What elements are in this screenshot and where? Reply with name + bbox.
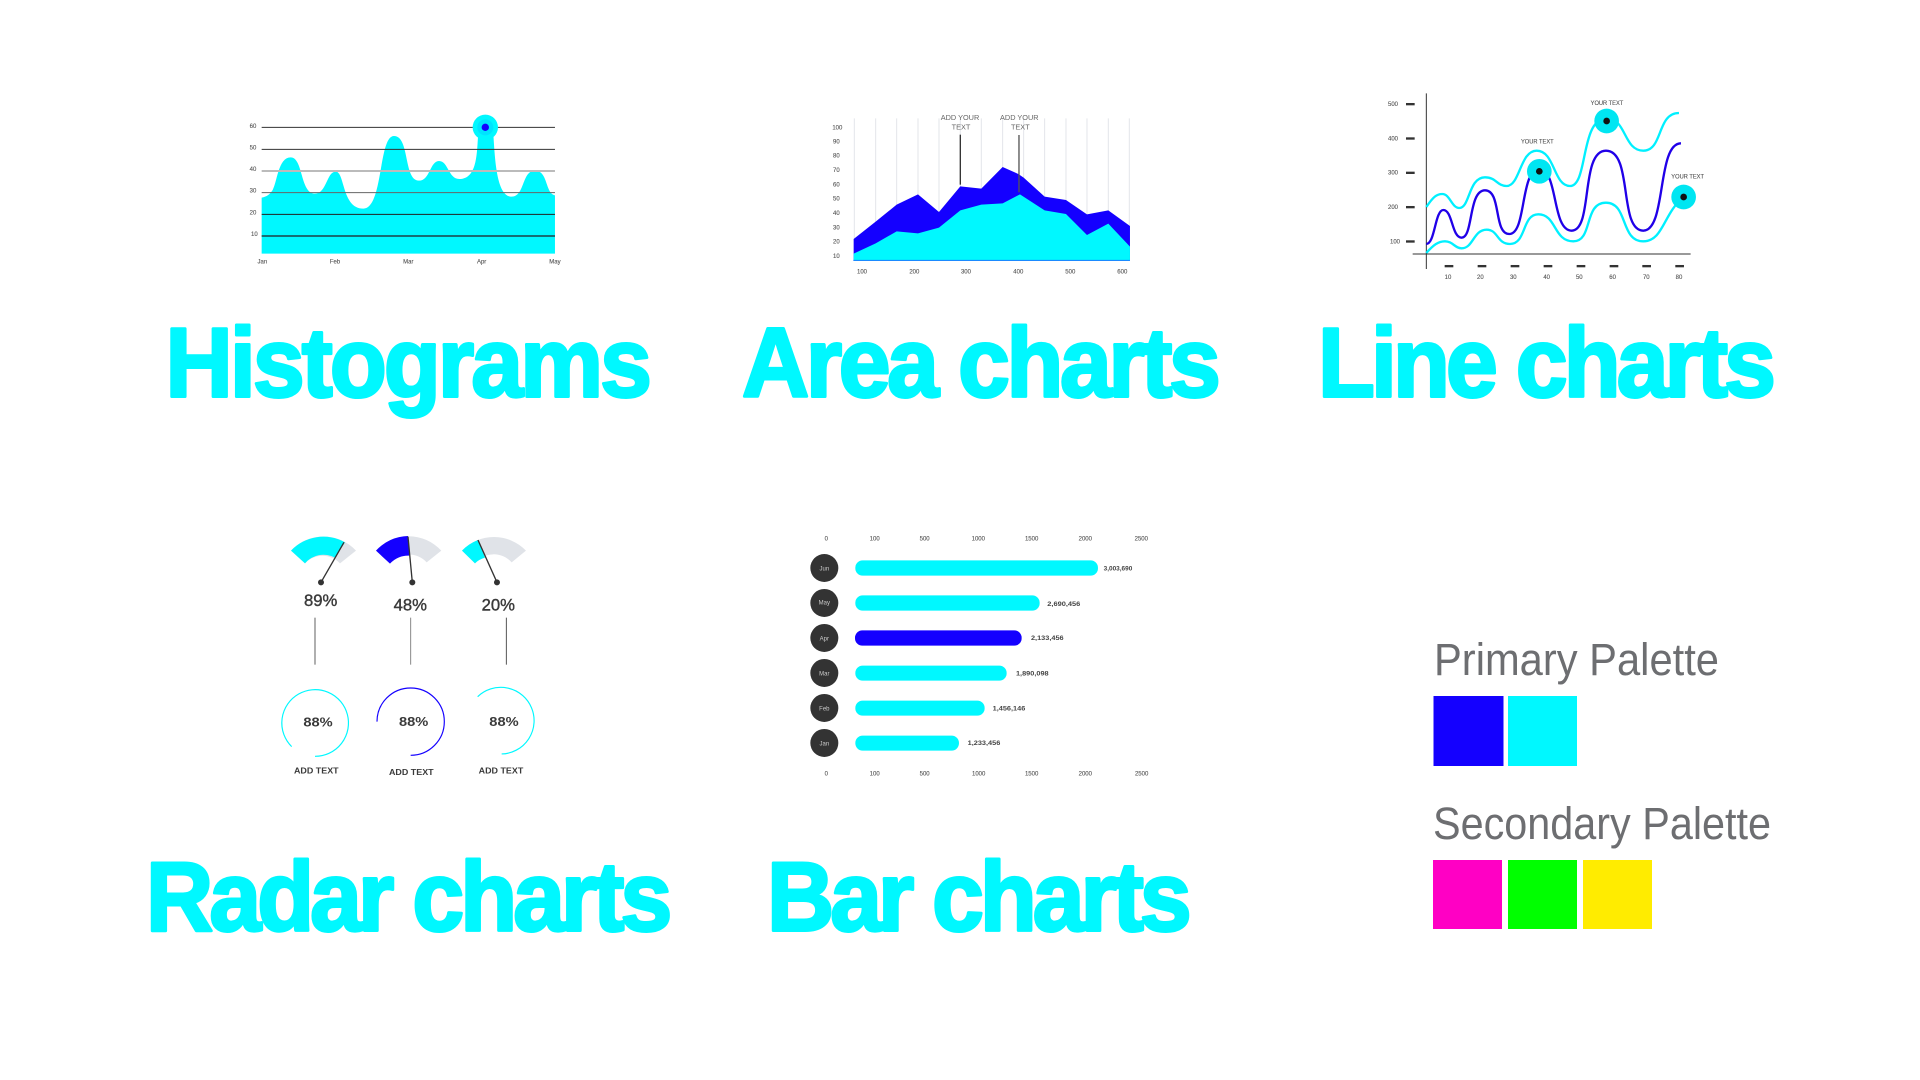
histogram x axis labels: Apr — [477, 260, 486, 266]
marker at 40 — [1527, 159, 1552, 184]
histogram y axis labels — [250, 124, 258, 238]
bar chart bottom axis: 0 — [825, 772, 829, 778]
histogram x axis labels: Mar — [403, 260, 413, 266]
line chart x labels: 40 — [1543, 275, 1551, 281]
bar values: 1,456,146 — [993, 706, 1026, 712]
panel: radar charts — [282, 536, 534, 777]
line chart x labels: 20 — [1477, 275, 1484, 281]
area chart y axis labels: 60 — [833, 182, 840, 188]
line chart x labels: 60 — [1609, 275, 1617, 281]
ring 3: ADD TEXT — [479, 766, 523, 775]
ring 2: 88% — [399, 715, 428, 729]
annotation: first add your text — [941, 113, 979, 185]
title: Area charts: Area charts — [742, 308, 1221, 418]
line chart x labels: 30 — [1510, 275, 1517, 281]
line chart y labels: 400 — [1388, 136, 1399, 142]
area chart y axis labels: 70 — [833, 168, 840, 174]
histogram x axis labels: May — [549, 260, 561, 266]
bar chart bottom axis: 100 — [870, 772, 880, 778]
bar chart top axis — [825, 537, 1149, 543]
area chart vertical grid — [854, 118, 1129, 260]
gauge 20 percent — [462, 537, 526, 614]
annotation: second add your text: TEXT — [1011, 123, 1030, 132]
cyan area series — [854, 194, 1130, 261]
panel: area chart — [832, 113, 1130, 275]
line chart x labels — [1445, 275, 1683, 281]
line chart tick marks — [1406, 103, 1684, 267]
line chart y labels: 200 — [1388, 205, 1399, 211]
ring 3 — [478, 687, 534, 775]
month badges: Mar — [819, 671, 829, 677]
title: Radar charts: Radar charts — [146, 842, 672, 952]
bar chart top axis: 0 — [825, 537, 829, 543]
month badges: Jan — [820, 741, 829, 747]
line chart x labels: 50 — [1576, 275, 1583, 281]
upper cyan line — [1426, 113, 1679, 208]
bar chart top axis: 1000 — [972, 537, 986, 543]
line chart x labels: 70 — [1643, 275, 1650, 281]
bar chart top axis: 1500 — [1025, 537, 1039, 543]
line chart y labels — [1388, 102, 1401, 245]
area chart y axis labels: 40 — [833, 211, 840, 217]
marker at 60 — [1594, 109, 1619, 133]
area chart x axis labels: 600 — [1117, 269, 1128, 275]
bar chart bottom axis: 1000 — [972, 772, 986, 778]
histogram y axis labels: 50 — [250, 145, 257, 151]
ring 1 — [282, 690, 348, 775]
area chart y axis labels: 20 — [833, 240, 840, 246]
histogram x axis labels — [258, 260, 561, 266]
area chart y axis labels — [832, 125, 843, 260]
gauge 89 percent — [291, 536, 356, 610]
area chart x axis labels: 300 — [961, 269, 972, 275]
line chart callouts: YOUR TEXT — [1671, 174, 1704, 180]
month badges: Apr — [820, 636, 829, 642]
annotation: second add your text: ADD YOUR — [1000, 113, 1039, 122]
histogram area — [262, 133, 555, 254]
bar chart bottom axis: 2000 — [1079, 772, 1093, 778]
title: Histograms: Histograms — [166, 308, 652, 418]
area chart y axis labels: 10 — [833, 254, 840, 260]
area chart x axis labels: 100 — [857, 269, 868, 275]
primary palette swatches — [1434, 696, 1577, 766]
annotation: first add your text: ADD YOUR — [941, 113, 979, 122]
line chart y labels: 100 — [1390, 239, 1401, 245]
ring 1: ADD TEXT — [294, 766, 339, 775]
heading: Secondary Palette: Secondary Palette — [1433, 798, 1771, 849]
histogram x axis labels: Jan — [258, 260, 267, 266]
bars — [855, 560, 1098, 751]
line chart callouts: YOUR TEXT — [1521, 139, 1554, 145]
heading: Primary Palette: Primary Palette — [1434, 634, 1719, 685]
area chart y axis labels: 80 — [833, 154, 840, 160]
ring 2 — [377, 688, 444, 777]
line chart axes — [1413, 93, 1691, 269]
bar chart bottom axis: 500 — [920, 772, 930, 778]
line chart callouts — [1521, 101, 1704, 180]
histogram x axis labels: Feb — [330, 260, 341, 266]
title: Bar charts: Bar charts — [767, 842, 1192, 952]
bar chart top axis: 2500 — [1135, 537, 1149, 543]
bar chart bottom axis: 1500 — [1025, 772, 1039, 778]
bar values: 1,233,456 — [968, 741, 1001, 747]
blue line — [1426, 143, 1681, 244]
bar values: 2,690,456 — [1047, 602, 1081, 608]
area chart x axis labels: 400 — [1013, 269, 1024, 275]
area chart x axis labels: 500 — [1065, 269, 1076, 275]
gauge 89 percent: 89% — [304, 591, 338, 610]
secondary palette swatches — [1433, 860, 1652, 929]
bar values: 1,890,098 — [1016, 671, 1049, 677]
month badges: Jun — [820, 566, 829, 572]
line chart callouts: YOUR TEXT — [1591, 101, 1624, 107]
bar chart bottom axis: 2500 — [1135, 772, 1149, 778]
area chart y axis labels: 100 — [832, 125, 843, 131]
bar values — [968, 567, 1133, 747]
ring 3: 88% — [489, 715, 519, 729]
panel: bar chart — [810, 537, 1149, 778]
gauge 48 percent — [376, 536, 441, 614]
ring 1: 88% — [303, 716, 333, 730]
histogram y axis labels: 40 — [250, 167, 257, 173]
blue area series — [854, 167, 1130, 261]
month badges: May — [819, 600, 830, 606]
bar values: 2,133,456 — [1031, 636, 1064, 642]
bar chart top axis: 500 — [920, 537, 930, 543]
histogram grid lines — [262, 127, 555, 236]
gauge 20 percent: 20% — [482, 595, 515, 614]
title: Line charts: Line charts — [1318, 308, 1776, 418]
histogram highlight marker — [473, 115, 498, 140]
marker at 80 — [1671, 185, 1696, 209]
area chart y axis labels: 90 — [833, 139, 840, 145]
annotation: first add your text: TEXT — [952, 123, 971, 132]
area chart x axis labels: 200 — [909, 269, 920, 275]
histogram y axis labels: 10 — [251, 232, 258, 238]
month badges — [810, 554, 838, 757]
annotation: second add your text — [1000, 113, 1039, 192]
lower cyan line — [1426, 197, 1684, 253]
line chart x labels: 10 — [1445, 275, 1452, 281]
area chart y axis labels: 50 — [833, 197, 840, 203]
bar values: 3,003,690 — [1104, 567, 1133, 573]
bar chart top axis: 2000 — [1079, 537, 1093, 543]
area chart x axis labels — [857, 269, 1128, 275]
histogram y axis labels: 30 — [250, 189, 257, 195]
month badges: Feb — [819, 706, 830, 712]
panel: histogram chart — [250, 115, 561, 266]
connector lines — [315, 618, 506, 665]
line chart y labels: 500 — [1388, 102, 1399, 108]
bar chart bottom axis — [825, 772, 1149, 778]
histogram y axis labels: 20 — [250, 211, 257, 217]
line chart y labels: 300 — [1388, 171, 1399, 177]
histogram y axis labels: 60 — [250, 124, 257, 130]
area chart y axis labels: 30 — [833, 225, 840, 231]
panel: line chart — [1388, 93, 1704, 281]
gauge 48 percent: 48% — [394, 595, 427, 614]
line chart x labels: 80 — [1676, 275, 1683, 281]
ring 2: ADD TEXT — [389, 768, 434, 777]
area chart baseline — [853, 259, 1130, 262]
bar chart top axis: 100 — [870, 537, 880, 543]
